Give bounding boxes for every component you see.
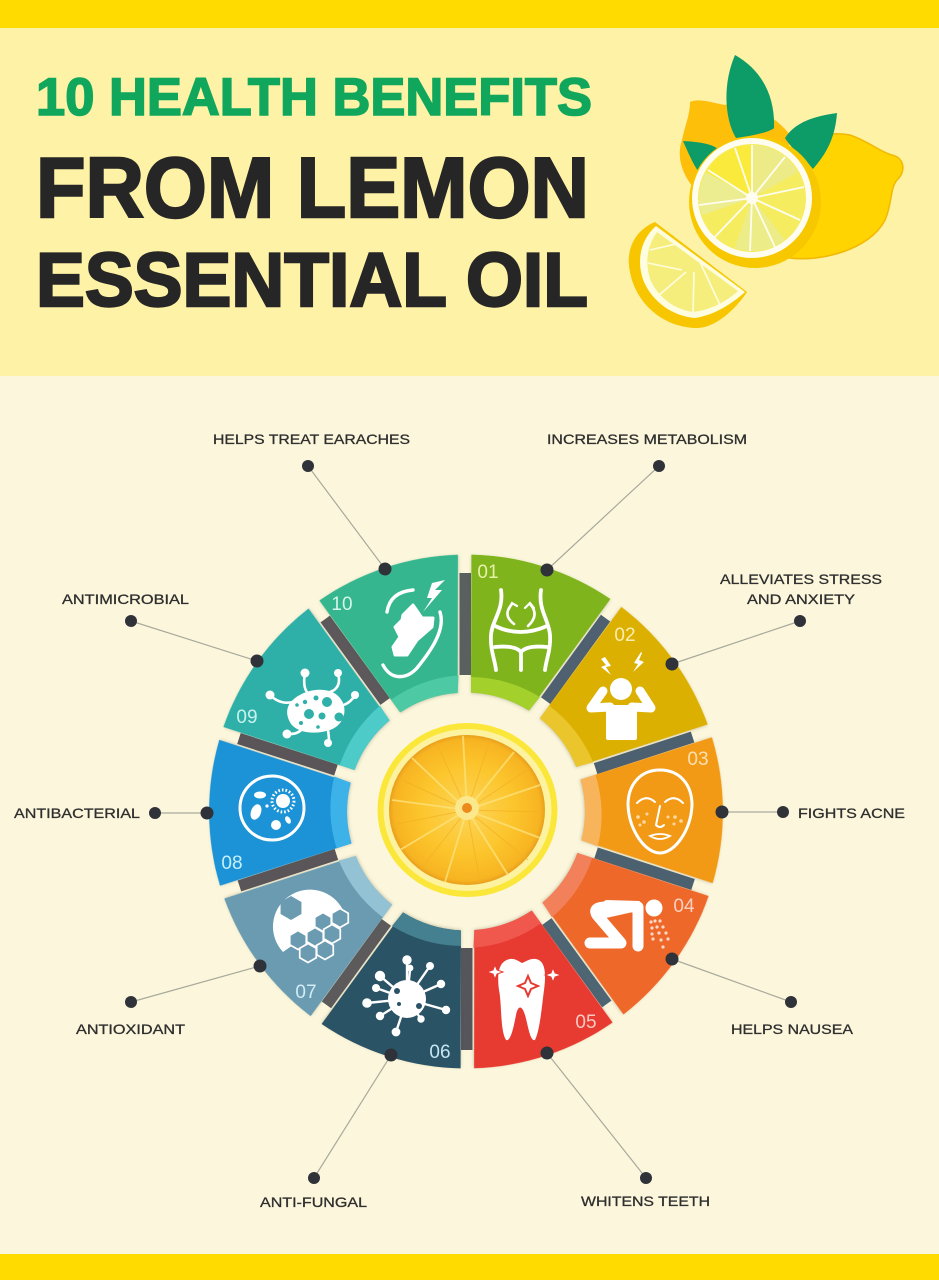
label: antibacterial: [14, 805, 207, 821]
label: fights acne: FIGHTS ACNE: [798, 805, 905, 821]
right lemon: [766, 134, 903, 259]
label: helps treat earaches: [213, 431, 410, 569]
icon: virus: [363, 956, 449, 1035]
icon: tooth: [487, 959, 561, 1040]
wheel separators: [237, 573, 695, 1050]
segment 02: stress: [529, 607, 734, 815]
icon: waist: [491, 590, 550, 670]
lemon slice: [689, 136, 821, 268]
icon: stressed person: [591, 652, 651, 740]
number 06: 06: [429, 1042, 451, 1063]
number 02: 02: [614, 625, 636, 646]
icon: face: [628, 770, 692, 853]
label: increases metabolism: [547, 431, 747, 570]
label: whitens teeth: [547, 1053, 710, 1209]
segment 06: anti-fungal: [322, 912, 461, 1068]
number 08: 08: [221, 853, 243, 874]
title line 3: ESSENTIAL OIL: [36, 238, 588, 323]
label: alleviates stress and anxiety: [672, 571, 882, 664]
label: increases metabolism: INCREASES METABOLISM: [547, 431, 747, 447]
label: alleviates stress and anxiety: ALLEVIATES STRESS: [720, 571, 882, 587]
bottom yellow band: [0, 1254, 939, 1280]
label: antimicrobial: [62, 591, 257, 661]
lemon illustration: [629, 55, 903, 328]
wheel anchor dots: [200, 562, 728, 1062]
segment 04: nausea: [517, 847, 709, 1028]
label: fights acne: [722, 805, 905, 821]
leaf large: [726, 55, 774, 138]
label: helps nausea: HELPS NAUSEA: [731, 1021, 854, 1037]
number 09: 09: [236, 707, 258, 728]
icon: ear: [383, 580, 445, 677]
number 01: 01: [477, 562, 499, 583]
number 10: 10: [331, 594, 353, 615]
label: antimicrobial: ANTIMICROBIAL: [62, 591, 189, 607]
label: antioxidant: ANTIOXIDANT: [76, 1021, 186, 1037]
label: anti-fungal: ANTI-FUNGAL: [260, 1194, 367, 1210]
label: antioxidant: [76, 966, 260, 1037]
segment 10: earaches: [319, 519, 524, 727]
icon: microbe: [266, 668, 359, 747]
number 04: 04: [673, 896, 695, 917]
benefit labels and leaders: [14, 431, 905, 1210]
label: antibacterial: ANTIBACTERIAL: [14, 805, 140, 821]
label: alleviates stress and anxiety: AND ANXIETY: [747, 591, 856, 607]
top yellow band: [0, 0, 939, 28]
leaf right: [785, 113, 837, 169]
title: [36, 68, 592, 323]
number 07: 07: [295, 982, 317, 1003]
label: helps nausea: [672, 959, 854, 1037]
segment 01: metabolism: [471, 555, 610, 711]
icon: vomiting person: [590, 900, 670, 949]
number 03: 03: [687, 749, 709, 770]
segment 09: antimicrobial: [223, 595, 415, 776]
title line 2: FROM LEMON: [36, 141, 589, 236]
number 05: 05: [575, 1012, 597, 1033]
segment 05: teeth: [408, 896, 613, 1104]
center lemon slice: [378, 723, 558, 897]
label: helps treat earaches: HELPS TREAT EARACHES: [213, 431, 410, 447]
icon: honeycomb: [273, 890, 348, 962]
segment 08: antibacterial: [177, 705, 368, 886]
leaf small: [683, 141, 718, 171]
icon: petri dish: [240, 776, 304, 840]
label: anti-fungal: [260, 1055, 391, 1210]
segment 03: acne: [564, 737, 755, 918]
header panel: [0, 28, 939, 376]
label: whitens teeth: WHITENS TEETH: [581, 1193, 710, 1209]
back lemon: [680, 100, 790, 200]
title line 1: 10 HEALTH BENEFITS: [36, 68, 592, 127]
segment 07: antioxidant: [198, 808, 403, 1016]
lemon wedge: [629, 222, 747, 328]
